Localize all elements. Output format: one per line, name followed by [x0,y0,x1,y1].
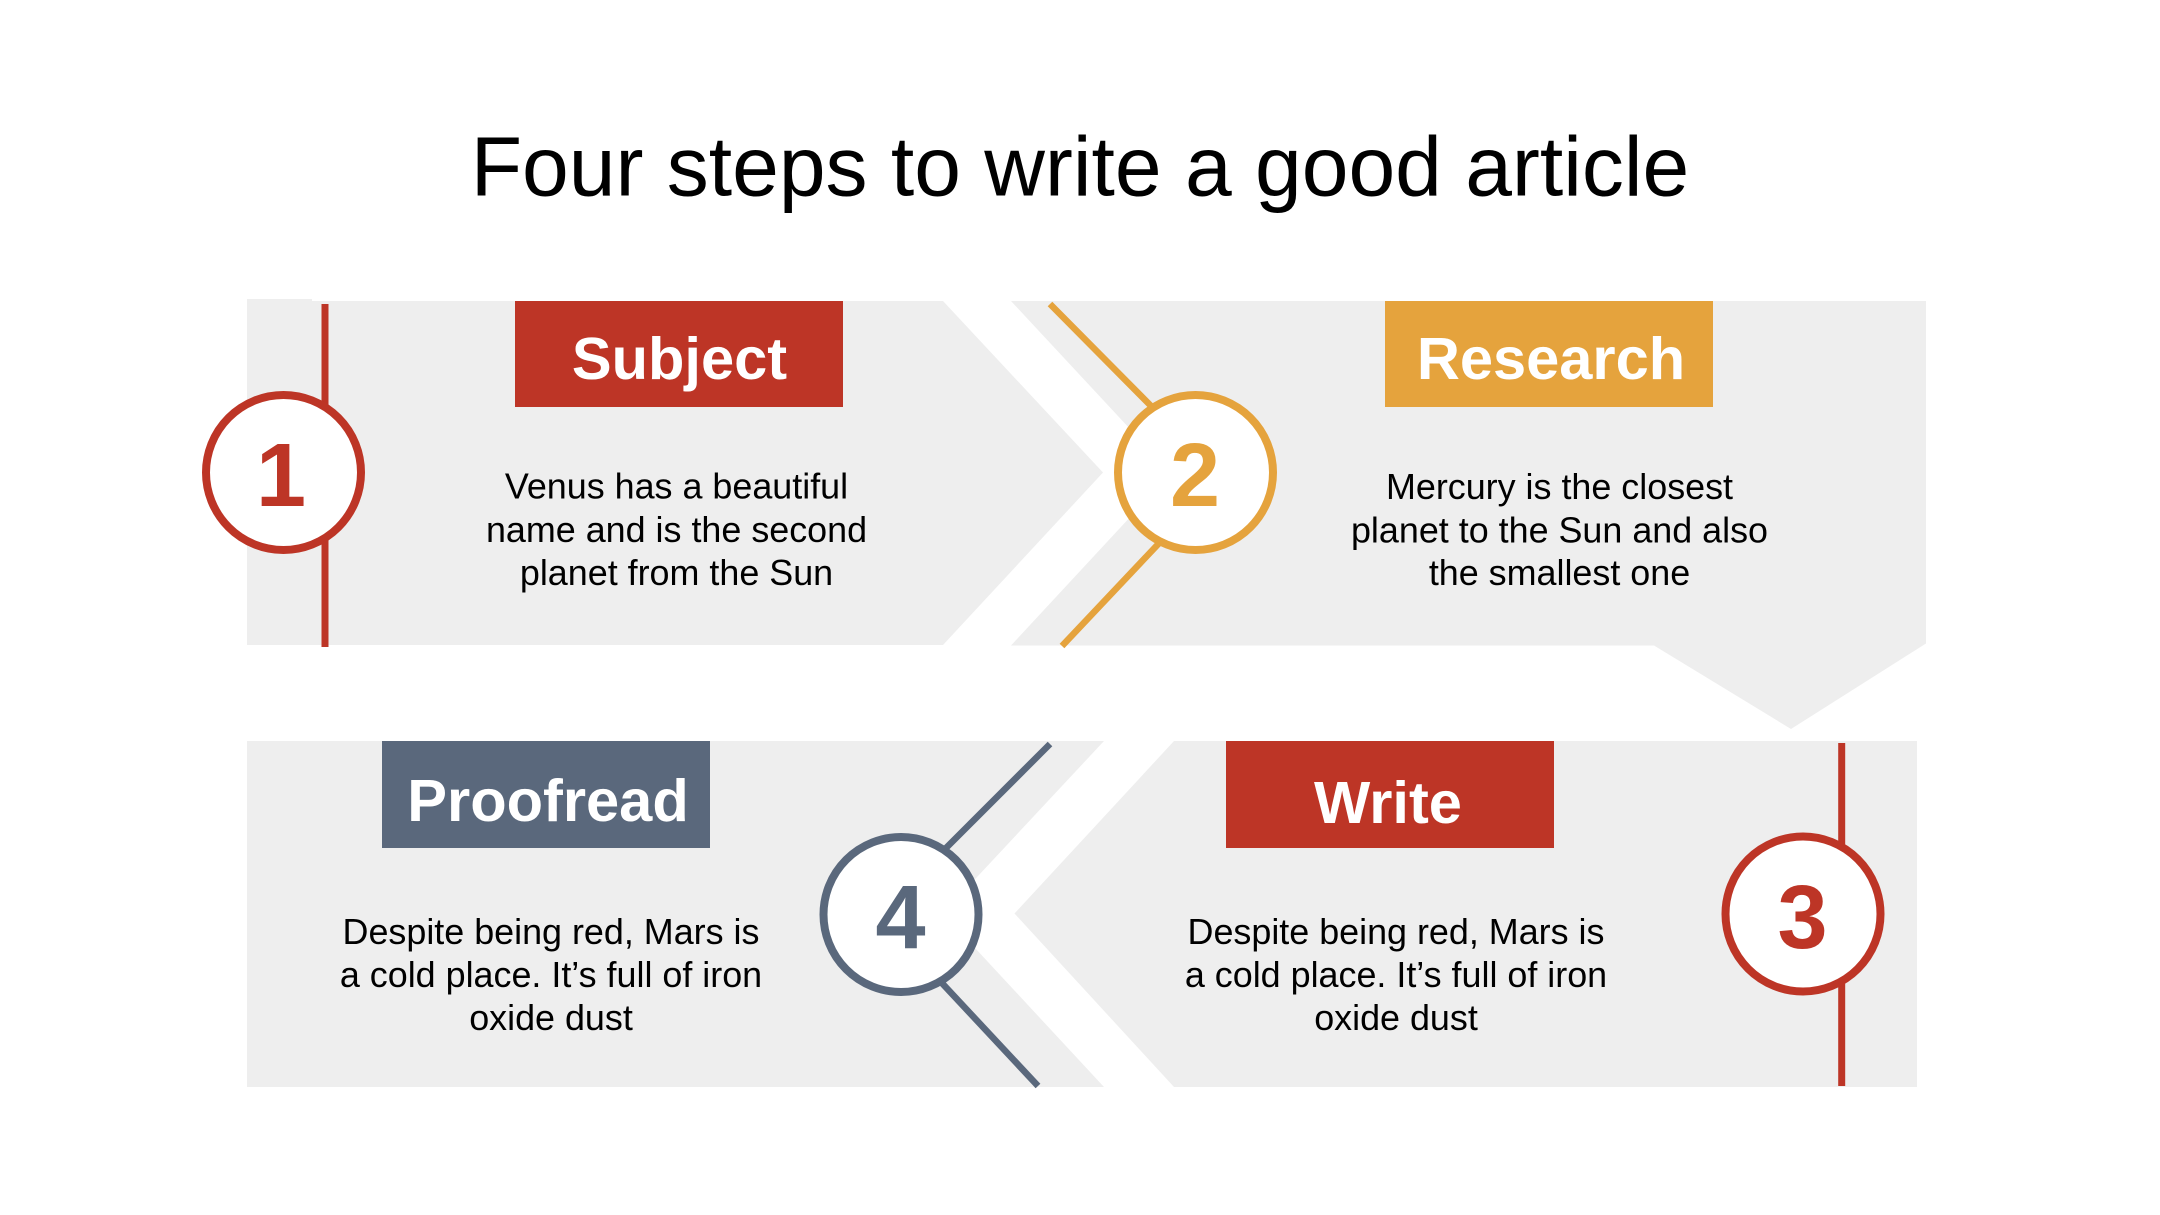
panel: step 1 subject [206,299,1103,647]
number badge 2: 2 [1170,426,1220,526]
chevron background 3 [1014,741,1917,1087]
number badge 3 [1726,836,1880,992]
heading: Subject: Subject [572,325,787,392]
heading: Proofread: Proofread [407,767,689,834]
vertical line 3 [1838,743,1845,1086]
number badge 4 [824,837,978,992]
chevron background 4 [247,741,1104,1087]
heading: Research: Research [1417,325,1685,392]
heading: Research [1385,301,1713,407]
number badge 2 [1118,395,1273,550]
heading: Write: Write [1314,769,1462,836]
body text 1: Venus has a beautiful [505,466,848,506]
angled lines 2 [1050,304,1163,646]
body text 3: a cold place. It’s full of iron [1185,955,1607,995]
heading: Write [1226,741,1554,848]
number badge 3: 3 [1777,868,1828,968]
body text 4: Despite being red, Mars is [343,912,759,952]
body text 2: the smallest one [1429,553,1690,593]
title: Four steps to write a good article [471,120,1689,214]
chevron background 1 [247,299,1103,645]
number badge 1 [206,395,361,550]
number badge 1: 1 [256,426,306,526]
number badge 4: 4 [875,868,926,968]
body text 2: planet to the Sun and also [1351,510,1768,550]
vertical line 1 [322,304,328,647]
heading: Proofread [382,741,710,848]
panel: step 2 research [1011,301,1926,729]
panel: step 4 proofread [247,741,1104,1087]
chevron background 2 [1011,301,1926,729]
body text 3: oxide dust [1314,998,1478,1038]
angled lines 4 [940,744,1050,1086]
heading: Subject [515,301,843,407]
body text 3: Despite being red, Mars is [1188,912,1604,952]
body text 1: planet from the Sun [520,553,833,593]
body text 2: Mercury is the closest [1386,467,1733,507]
body text 4: a cold place. It’s full of iron [340,955,762,995]
body text 4: oxide dust [469,998,633,1038]
panel: step 3 write [1014,741,1917,1087]
body text 1: name and is the second [486,510,867,550]
